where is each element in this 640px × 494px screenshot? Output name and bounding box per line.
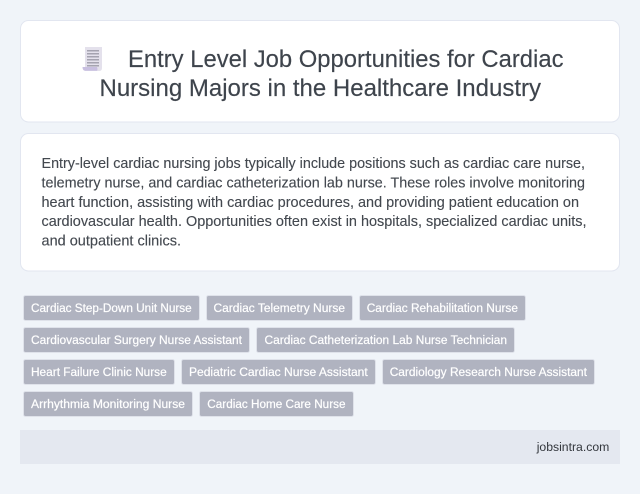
tag: Cardiovascular Surgery Nurse Assistant [31,333,243,347]
tag [256,328,514,352]
heading [100,46,564,102]
tag: Cardiac Telemetry Nurse [214,301,345,315]
tag [24,360,174,384]
tag [206,296,352,320]
tag: Arrhythmia Monitoring Nurse [31,397,185,411]
tag [24,392,192,416]
tag [182,360,376,384]
tag [360,296,526,320]
tags: job titles [24,296,594,416]
heading: Nursing Majors in the Healthcare Industry [100,75,541,102]
text block: description: and outpatient clinics. [42,234,181,250]
tag: Cardiac Rehabilitation Nurse [367,301,518,315]
tag [382,360,594,384]
icon: document scroll [82,47,102,71]
text block: description: telemetry nurse, and cardiac catheterization lab nurse. These roles involve monitoring [42,175,585,191]
text block: description: Entry-level cardiac nursing jobs typically include positions such as cardiac care nurse, [42,156,585,172]
tag [24,296,200,320]
footer bar [20,430,620,464]
heading: Entry Level Job Opportunities for Cardiac [128,46,564,73]
panel: description [20,134,620,271]
tag: Cardiac Step-Down Unit Nurse [31,301,192,315]
tag: Pediatric Cardiac Nurse Assistant [189,365,368,379]
tag: Cardiology Research Nurse Assistant [390,365,588,379]
tag: Cardiac Home Care Nurse [207,397,346,411]
text block: description: heart function, assisting with cardiac procedures, and providing patient education on [42,195,579,211]
tag: Cardiac Catheterization Lab Nurse Technician [264,333,507,347]
text block: description: cardiovascular health. Opportunities often exist in hospitals, specialized cardiac units, [42,214,586,230]
tag [200,392,354,416]
tag: Heart Failure Clinic Nurse [31,365,167,379]
text block: description [42,156,586,250]
panel: title card [20,20,620,122]
tag [24,328,250,352]
footer text: jobsintra.com [536,440,609,454]
